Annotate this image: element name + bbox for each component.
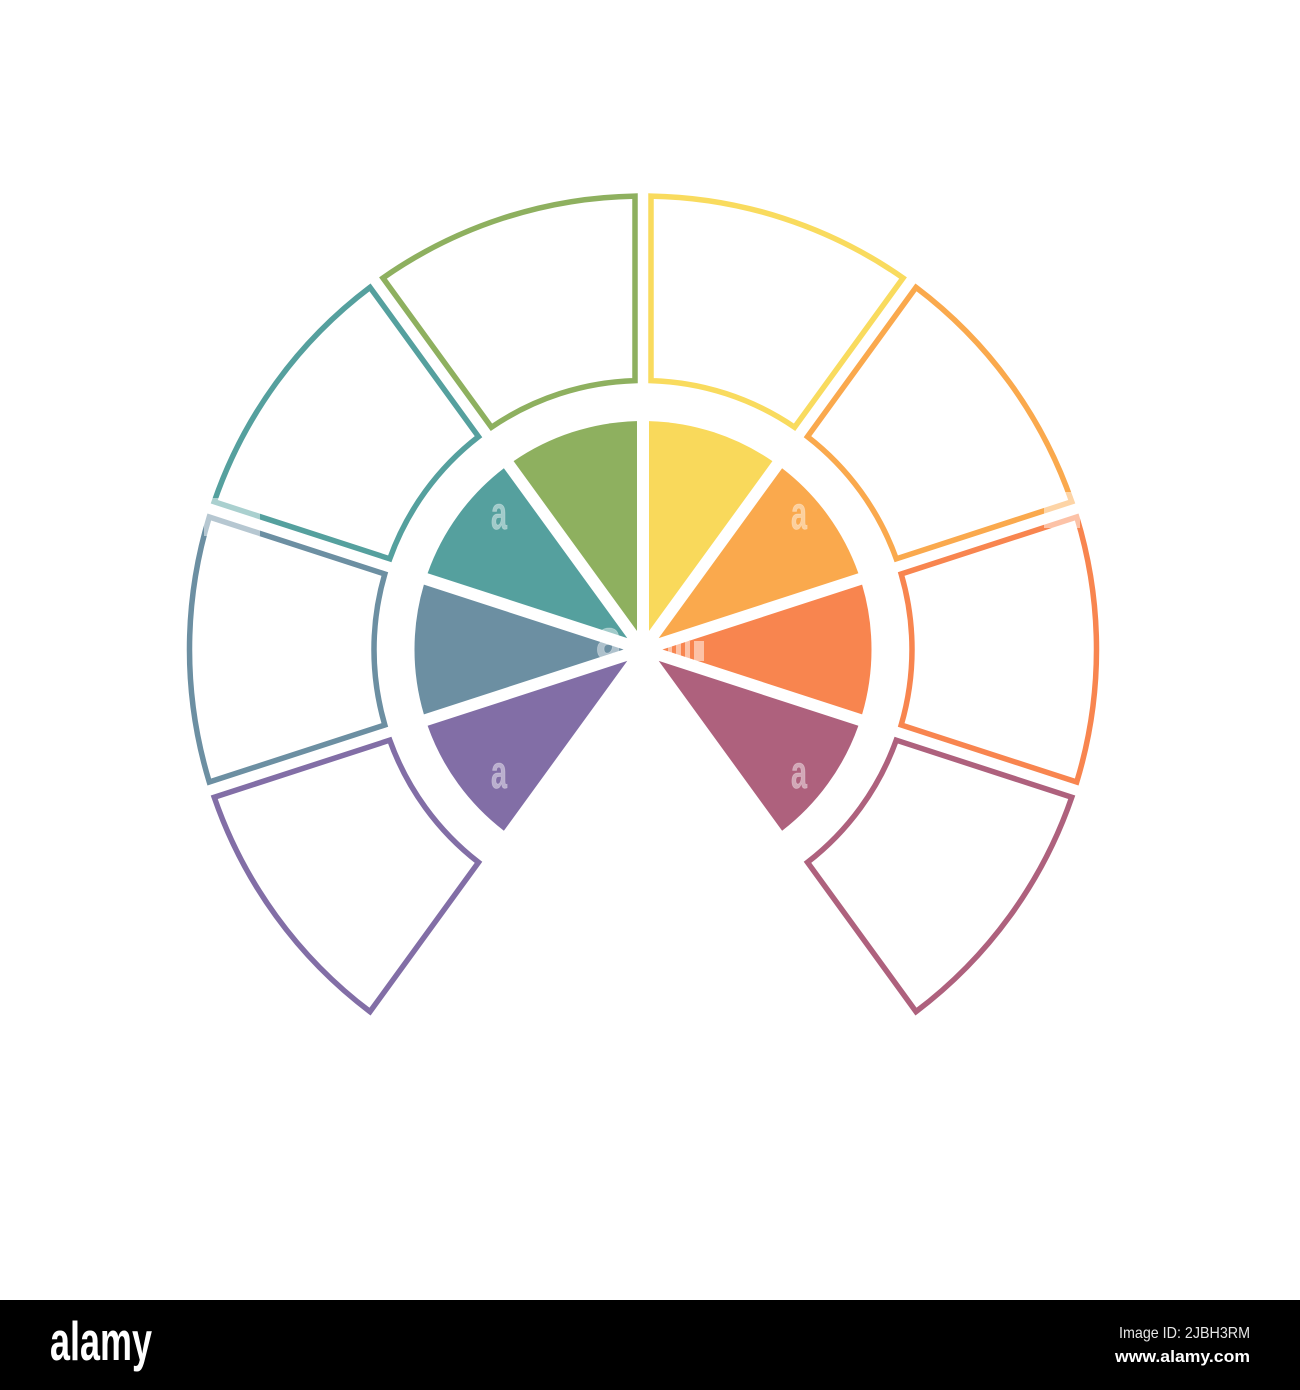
panel: outline teal bbox=[214, 262, 512, 573]
wedge: teal bbox=[428, 456, 665, 638]
watermark fragments: a bbox=[491, 487, 507, 539]
wedge: green bbox=[514, 389, 737, 631]
wedge: yellow bbox=[649, 421, 772, 631]
website: www.alamy.com bbox=[1114, 1347, 1250, 1366]
panel: outline maroon bbox=[774, 726, 1072, 1037]
watermark fragments: a bbox=[596, 607, 623, 670]
image id: Image ID: 2JBH3RM bbox=[1119, 1325, 1250, 1342]
panel: outline light orange bbox=[780, 287, 1120, 623]
panel: outline slate blue bbox=[131, 471, 429, 782]
watermark fragments: a bbox=[791, 487, 807, 539]
watermark fragments bbox=[204, 487, 1080, 798]
logo: alamy: alamy bbox=[50, 1310, 152, 1372]
watermark fragments: a bbox=[791, 746, 807, 798]
panel: outline deep orange bbox=[857, 517, 1155, 828]
wedge: deep orange bbox=[662, 585, 900, 767]
wedge: maroon bbox=[621, 661, 858, 843]
outer ring of outlined panels bbox=[131, 130, 1155, 1037]
watermark fragments: a bbox=[491, 746, 507, 798]
wedge: purple bbox=[404, 588, 627, 831]
panel: outline purple bbox=[166, 676, 506, 1012]
footer bar bbox=[0, 1300, 1300, 1390]
panel: outline yellow bbox=[651, 196, 903, 427]
wedge: slate blue bbox=[386, 532, 624, 714]
diagram: segmented wheel bbox=[131, 130, 1155, 1037]
panel: outline green bbox=[383, 130, 723, 465]
wedge: light orange bbox=[659, 468, 882, 711]
inner pie of filled wedges bbox=[386, 389, 900, 843]
